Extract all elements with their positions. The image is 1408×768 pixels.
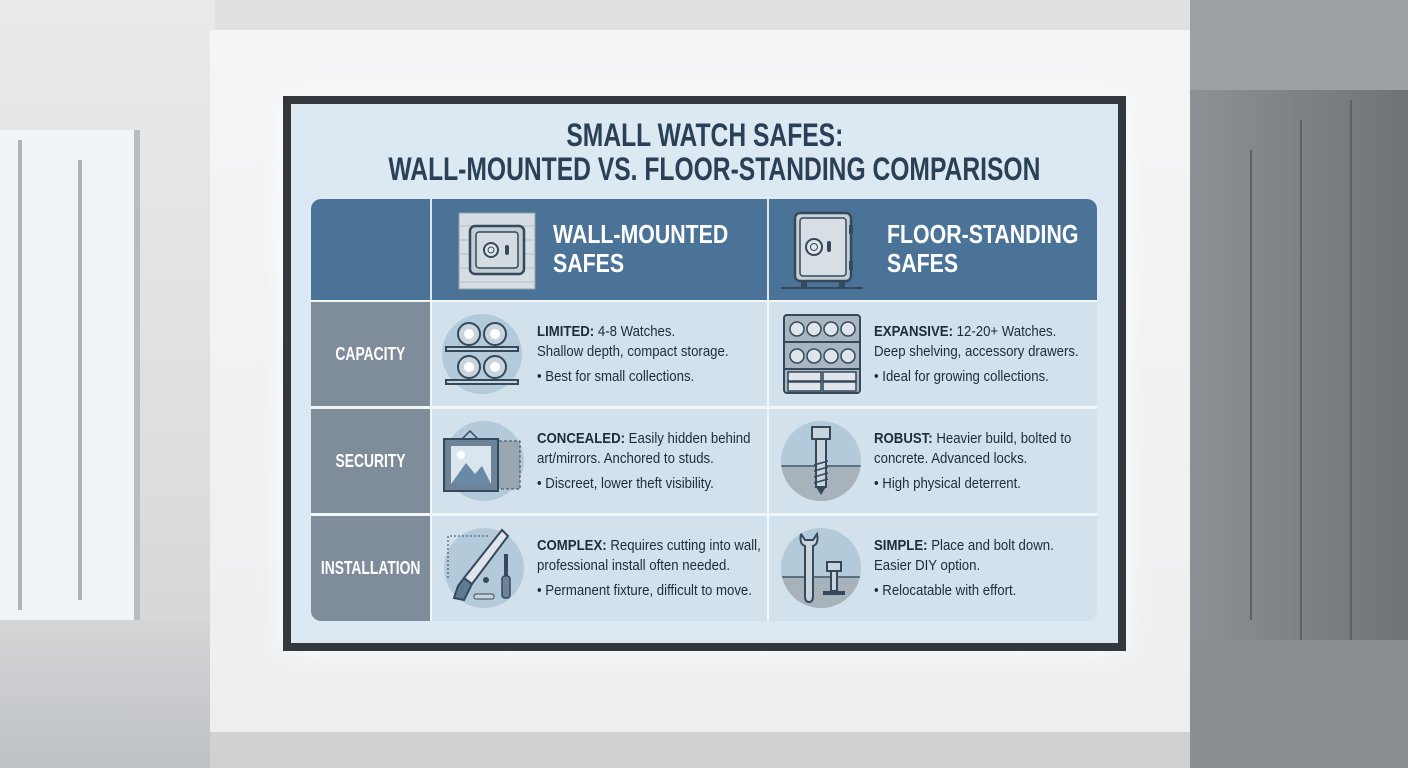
text: limited: LIMITED: 4-8 Watches.	[537, 323, 675, 340]
text: complex	[537, 537, 761, 599]
header: wall-mounted	[458, 212, 728, 290]
background: ceiling	[215, 0, 1190, 30]
header: floor-standing	[781, 212, 1078, 289]
text: simple: • Relocatable with effort.	[874, 582, 1016, 599]
text: concealed: art/mirrors. Anchored to studs.	[537, 450, 714, 467]
heading: floor-standing safes	[887, 219, 1078, 278]
title	[388, 117, 1040, 187]
background: floor	[210, 732, 1190, 768]
label: capacity: CAPACITY	[336, 344, 405, 364]
background: right dark panels	[1190, 0, 1408, 768]
label: security	[311, 409, 430, 513]
title: SMALL WATCH SAFES:	[566, 117, 843, 153]
text: simple	[874, 537, 1054, 599]
text: expansive: • Ideal for growing collections.	[874, 368, 1049, 385]
screen	[291, 104, 1118, 643]
text: concealed: • Discreet, lower theft visibility.	[537, 475, 714, 492]
header row	[311, 199, 1097, 300]
label: capacity	[311, 302, 430, 406]
label: installation: INSTALLATION	[321, 558, 420, 578]
row: security	[311, 409, 1097, 513]
text: limited	[537, 323, 729, 385]
icon: saw and screwdriver	[444, 528, 524, 608]
icon: floor safe	[781, 212, 863, 289]
text: limited: Shallow depth, compact storage.	[537, 343, 729, 360]
text: limited: • Best for small collections.	[537, 368, 694, 385]
background: left window area	[0, 0, 215, 768]
row: capacity	[311, 302, 1097, 406]
title: WALL-MOUNTED VS. FLOOR-STANDING COMPARISON	[388, 151, 1040, 187]
heading: floor-standing safes: FLOOR-STANDING	[887, 219, 1078, 249]
text: complex: COMPLEX: Requires cutting into wall,	[537, 537, 761, 554]
heading: wall-mounted safes: WALL-MOUNTED	[553, 219, 728, 249]
label: installation	[311, 516, 430, 621]
heading: wall-mounted safes: SAFES	[553, 248, 624, 278]
row: installation	[311, 516, 1097, 621]
icon: anchor bolt in concrete	[781, 421, 861, 501]
text: robust: concrete. Advanced locks.	[874, 450, 1027, 467]
text: simple: SIMPLE: Place and bolt down.	[874, 537, 1054, 554]
icon: watch cabinet	[783, 314, 861, 394]
screen frame	[283, 96, 1126, 651]
icon: wall safe	[458, 212, 536, 290]
background: white wall	[210, 30, 1190, 732]
text: complex: professional install often needed.	[537, 557, 730, 574]
text: complex: • Permanent fixture, difficult to move.	[537, 582, 752, 599]
text: simple: Easier DIY option.	[874, 557, 980, 574]
icon: wrench and bolt	[781, 528, 861, 608]
text: expansive: EXPANSIVE: 12-20+ Watches.	[874, 323, 1056, 340]
icon: watch shelves	[442, 314, 522, 394]
text: concealed: CONCEALED: Easily hidden behind	[537, 430, 750, 447]
label: security: SECURITY	[335, 450, 406, 470]
text: robust	[874, 430, 1071, 492]
heading: wall-mounted safes	[553, 219, 728, 278]
heading: floor-standing safes: SAFES	[887, 248, 958, 278]
icon: hidden safe behind picture	[443, 421, 524, 501]
table	[311, 199, 1097, 621]
text: robust: ROBUST: Heavier build, bolted to	[874, 430, 1071, 447]
text: concealed	[537, 430, 750, 492]
text: expansive: Deep shelving, accessory drawers.	[874, 343, 1079, 360]
text: robust: • High physical deterrent.	[874, 475, 1021, 492]
text: expansive	[874, 323, 1079, 385]
